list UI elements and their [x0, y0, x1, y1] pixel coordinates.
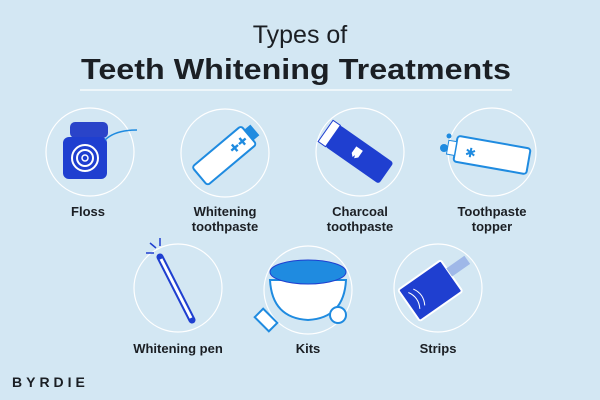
item: charcoal toothpaste: [316, 108, 404, 234]
icon: blue tube: [318, 120, 394, 184]
item: charcoal toothpaste: toothpaste: [327, 219, 393, 234]
item: whitening toothpaste: Whitening: [194, 204, 256, 219]
title: [81, 21, 511, 86]
item: floss: [46, 108, 137, 219]
icon: pen: [146, 238, 192, 320]
item: whitening pen: [133, 238, 223, 356]
item: kits: [255, 246, 352, 356]
item: whitening pen: Whitening pen: [133, 341, 223, 356]
item: toothpaste topper: Toothpaste: [457, 204, 527, 219]
logo: BYRDIE: BYRDIE: [12, 374, 89, 390]
item: kits: Kits: [296, 341, 320, 356]
item: floss: Floss: [71, 204, 105, 219]
icon: strips pack: [398, 248, 480, 321]
icon: floss: [63, 122, 137, 179]
item: whitening toothpaste: toothpaste: [192, 219, 258, 234]
icon: white tube: ✚✚: [227, 133, 251, 157]
item: whitening toothpaste: [181, 109, 269, 234]
title: Teeth Whitening Treatments: [81, 54, 511, 86]
icon: topper tube: ✱: [464, 144, 477, 161]
item: charcoal toothpaste: Charcoal: [332, 204, 388, 219]
item: strips: [394, 244, 482, 356]
title: Types of: [253, 21, 347, 49]
icon: kit case: [255, 260, 346, 331]
item: toothpaste topper: [440, 108, 536, 234]
item: toothpaste topper: topper: [472, 219, 512, 234]
item: strips: Strips: [420, 341, 456, 356]
